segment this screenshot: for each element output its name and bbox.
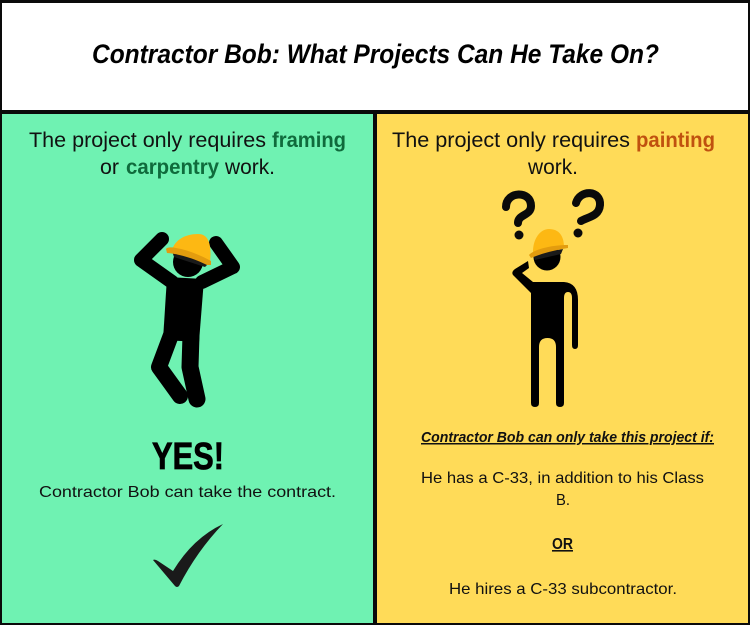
panel: framing or carpentry: [2, 114, 373, 623]
text block: left panel condition: carpentry: [126, 156, 219, 179]
icon: question marks: [506, 193, 600, 240]
text block: left panel condition: work.: [224, 156, 275, 179]
text block: conditions: He hires a C-33 subcontractor.: [449, 581, 677, 598]
panel: title banner: [2, 3, 748, 110]
text block: conditions: He has a C-33, in addition to his Class: [421, 470, 704, 487]
heading: yes: YES!: [152, 436, 224, 478]
panel: painting: [377, 114, 748, 623]
text block: conditions: OR: [552, 536, 573, 553]
text block: left panel condition: [29, 129, 346, 179]
icon: puzzled contractor: [512, 229, 578, 407]
icon: check mark: [153, 524, 223, 587]
text block: left panel condition: or: [100, 156, 119, 179]
text block: right panel condition: The project only requires: [392, 129, 630, 152]
icon: cheering contractor: [141, 234, 233, 399]
text block: right panel condition: painting: [636, 129, 715, 152]
text block: conditions: [421, 429, 714, 598]
text block: left panel condition: framing: [272, 129, 346, 152]
title: Contractor Bob: What Projects Can He Take On?: [92, 39, 659, 69]
text block: conditions: B.: [556, 492, 570, 509]
text block: right panel condition: [392, 129, 715, 179]
text block: left panel result: Contractor Bob can take the contract.: [39, 484, 336, 501]
text block: conditions: Contractor Bob can only take this project if:: [421, 429, 714, 446]
text block: right panel condition: work.: [527, 156, 578, 179]
text block: left panel condition: The project only requires: [29, 129, 266, 152]
